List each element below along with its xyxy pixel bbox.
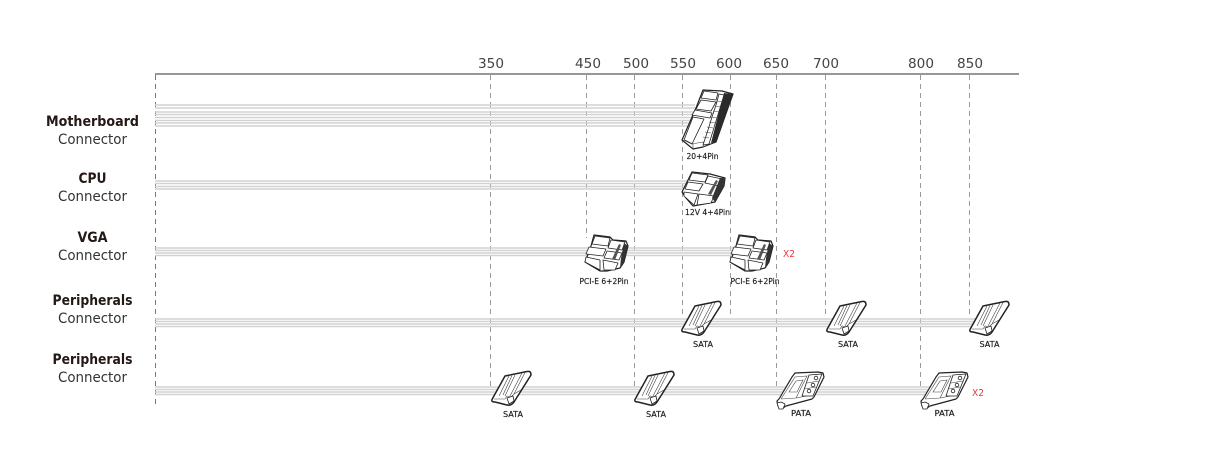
row: peripherals SATA cable and connectors (155, 301, 1009, 349)
icon: PCI-E connector 2 (730, 235, 773, 271)
text: SATA 3: SATA (980, 340, 1000, 349)
text: SATA 5: SATA (646, 410, 667, 419)
label: CPU Connector: Connector (58, 189, 127, 205)
icon: SATA 4 (492, 371, 531, 405)
label: CPU Connector (58, 171, 127, 205)
text: SATA 1: SATA (693, 340, 714, 349)
axis labels: wattage: 800 (908, 56, 934, 72)
icon: 20+4 pin connector (682, 90, 733, 149)
icon: SATA 2 (827, 301, 866, 335)
text: X2 VGA: X2 (783, 249, 795, 260)
label: Peripherals Connector second: Peripherals (52, 352, 132, 368)
row: motherboard cable and connector (155, 90, 733, 161)
label: Peripherals Connector (52, 293, 132, 327)
row: CPU cable and connector (155, 172, 730, 217)
row: peripherals SATA/PATA cable and connectors (155, 371, 984, 419)
text: 20+4Pin: 20+4Pin (686, 152, 718, 161)
icon: SATA 3 (970, 301, 1009, 335)
axis labels: wattage: 600 (716, 56, 742, 72)
axis labels: wattage: 450 (575, 56, 601, 72)
axis labels: wattage: 350 (478, 56, 504, 72)
axis labels: wattage: 550 (670, 56, 696, 72)
label: Motherboard Connector (46, 114, 139, 148)
axis labels: wattage: 850 (957, 56, 983, 72)
axis labels: wattage: 650 (763, 56, 789, 72)
row: VGA cable and connectors (155, 235, 795, 286)
axis labels: wattage: 700 (813, 56, 839, 72)
x axis (155, 56, 1019, 74)
icon: PATA 2 (921, 372, 968, 409)
icon: PATA 1 (777, 372, 824, 409)
text: PCI-E 6+2Pin 1: PCI-E 6+2Pin (580, 277, 628, 286)
icon: 12V 4+4 pin connector (682, 172, 725, 206)
label: CPU Connector: CPU (78, 171, 106, 187)
label: Peripherals Connector: Peripherals (52, 293, 132, 309)
label: Peripherals Connector: Connector (58, 311, 127, 327)
text: X2 PATA: X2 (972, 388, 984, 399)
label: VGA Connector: VGA (78, 230, 108, 246)
label: Motherboard Connector: Connector (58, 132, 127, 148)
row labels (46, 114, 139, 386)
label: VGA Connector (58, 230, 127, 264)
text: SATA 2: SATA (838, 340, 859, 349)
icon: SATA 1 (682, 301, 721, 335)
label: Motherboard Connector: Motherboard (46, 114, 139, 130)
text: PCI-E 6+2Pin 2: PCI-E 6+2Pin (730, 277, 780, 286)
text: PATA 2: PATA (934, 409, 955, 418)
axis labels: wattage: 500 (623, 56, 649, 72)
text: SATA 4: SATA (503, 410, 524, 419)
text: 12V 4+4Pin: 12V 4+4Pin (685, 208, 730, 217)
label: VGA Connector: Connector (58, 248, 127, 264)
icon: PCI-E connector 1 (585, 235, 628, 271)
icon: SATA 5 (635, 371, 674, 405)
label: Peripherals Connector second: Connector (58, 370, 127, 386)
axis labels: wattage (478, 56, 983, 72)
label: Peripherals Connector second (52, 352, 132, 386)
text: PATA 1: PATA (791, 409, 812, 418)
